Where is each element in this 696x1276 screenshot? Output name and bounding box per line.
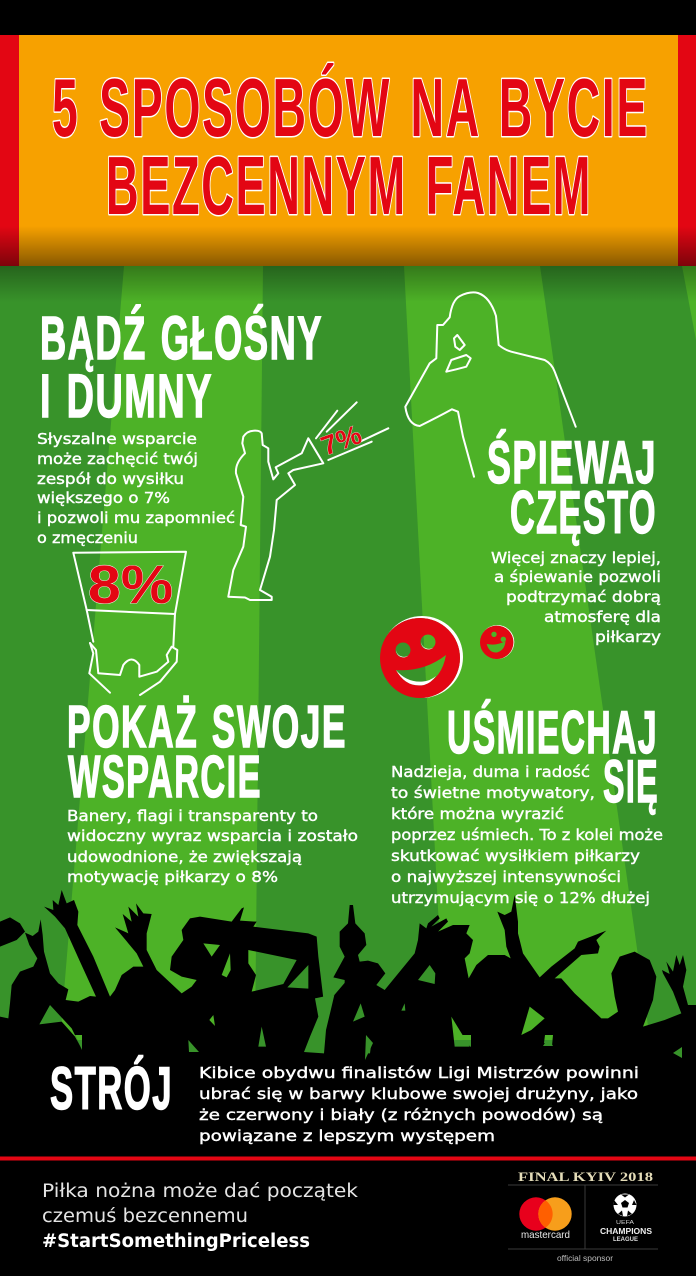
icon: small smiley (480, 625, 514, 659)
heading: pokaż swoje wsparcie: POKAŻ SWOJE (67, 694, 347, 760)
text block: footer slogan: Piłka nożna może dać początek (42, 1181, 358, 1202)
heading: pokaż swoje wsparcie: WSPARCIE (68, 744, 262, 810)
text block: nadzieja: które można wyrazić (391, 805, 564, 823)
text block: więcej znaczy lepiej: a śpiewanie pozwoli (494, 568, 661, 586)
icon: champions league logo: UEFA (616, 1220, 635, 1226)
label: 8%: 8% (88, 555, 173, 615)
icon: champions league logo (600, 1194, 653, 1243)
text block: kibice: Kibice obydwu finalistów Ligi Mistrzów powinni (199, 1064, 639, 1082)
heading: bądź głośny i dumny: I DUMNY (40, 362, 213, 430)
text block: footer slogan (42, 1181, 358, 1252)
text block: więcej znaczy lepiej: atmosferę dla (544, 608, 661, 626)
text block: banery: Banery, flagi i transparenty to (67, 807, 318, 825)
icon: singing man (405, 292, 576, 477)
text block: kibice: ubrać się w barwy klubowe swojej drużyny, jako (199, 1085, 638, 1103)
heading: bądź głośny i dumny: BĄDŹ GŁOŚNY (40, 304, 323, 372)
icon: banner held by fan (73, 552, 186, 695)
icon: big smiley (380, 616, 463, 698)
text block: więcej znaczy lepiej: piłkarzy (595, 628, 661, 646)
icon: champions league logo: LEAGUE (613, 1237, 638, 1243)
panel: title banner (0, 35, 696, 266)
text block: nadzieja: Nadzieja, duma i radość (391, 763, 590, 781)
panel: green football pitch with stripes (0, 266, 696, 1066)
text block: nadzieja: o najwyższej intensywności (391, 868, 621, 886)
text block: nadzieja (391, 763, 663, 907)
text block: footer slogan: czemuś bezcennemu (42, 1206, 248, 1227)
text block: banery: udowodnione, że zwiększają (67, 848, 302, 866)
red divider (0, 1156, 696, 1160)
text block: nadzieja: poprzez uśmiech. To z kolei może (391, 826, 663, 844)
icon: champions league logo: CHAMPIONS (600, 1227, 653, 1236)
text block: więcej znaczy lepiej (491, 549, 661, 646)
label: 7%: 7% (317, 419, 366, 461)
text block: kibice: że czerwony i biały (z różnych powodów) są (199, 1106, 603, 1124)
heading: śpiewaj często (487, 429, 657, 546)
text block: kibice: powiązane z lepszym występem (199, 1127, 495, 1145)
text block: więcej znaczy lepiej: Więcej znaczy lepiej, (491, 549, 661, 567)
text block: słyszalne wsparcie: Słyszalne wsparcie (37, 430, 197, 448)
text block: kibice (199, 1064, 639, 1145)
icon: mastercard logo (519, 1197, 572, 1241)
text block: słyszalne wsparcie: o zmęczeniu (37, 529, 138, 547)
title (52, 61, 649, 232)
text block: słyszalne wsparcie (37, 430, 235, 547)
text block: słyszalne wsparcie: zespół do wysiłku (37, 470, 184, 488)
label: final kyiv 2018: FINAL KYIV 2018 (518, 1170, 653, 1184)
heading: uśmiechaj się (447, 699, 659, 815)
text block: banery (67, 807, 358, 886)
text block: słyszalne wsparcie: może zachęcić twój (37, 450, 198, 468)
text block: nadzieja: skutkować wysiłkiem piłkarzy (391, 847, 640, 865)
sponsor logos (508, 1170, 658, 1263)
text block: słyszalne wsparcie: i pozwoli mu zapomnieć (37, 509, 235, 527)
icon: mastercard logo: mastercard (521, 1229, 570, 1241)
text block: footer slogan: #StartSomethingPriceless (42, 1231, 310, 1252)
text block: nadzieja: utrzymującym się o 12% dłużej (391, 889, 650, 907)
text block: nadzieja: to świetne motywatory, (391, 784, 595, 802)
text block: banery: motywację piłkarzy o 8% (67, 868, 278, 886)
icon: man with megaphone (228, 402, 388, 600)
text block: słyszalne wsparcie: większego o 7% (37, 489, 170, 507)
heading: strój: STRÓJ (50, 1055, 173, 1122)
label: official sponsor: official sponsor (557, 1254, 613, 1263)
text block: więcej znaczy lepiej: podtrzymać dobrą (506, 588, 661, 606)
text block: banery: widoczny wyraz wsparcia i zostało (67, 827, 358, 845)
heading: pokaż swoje wsparcie (67, 694, 347, 810)
crowd silhouette (0, 890, 696, 1066)
heading: bądź głośny i dumny (40, 304, 323, 430)
